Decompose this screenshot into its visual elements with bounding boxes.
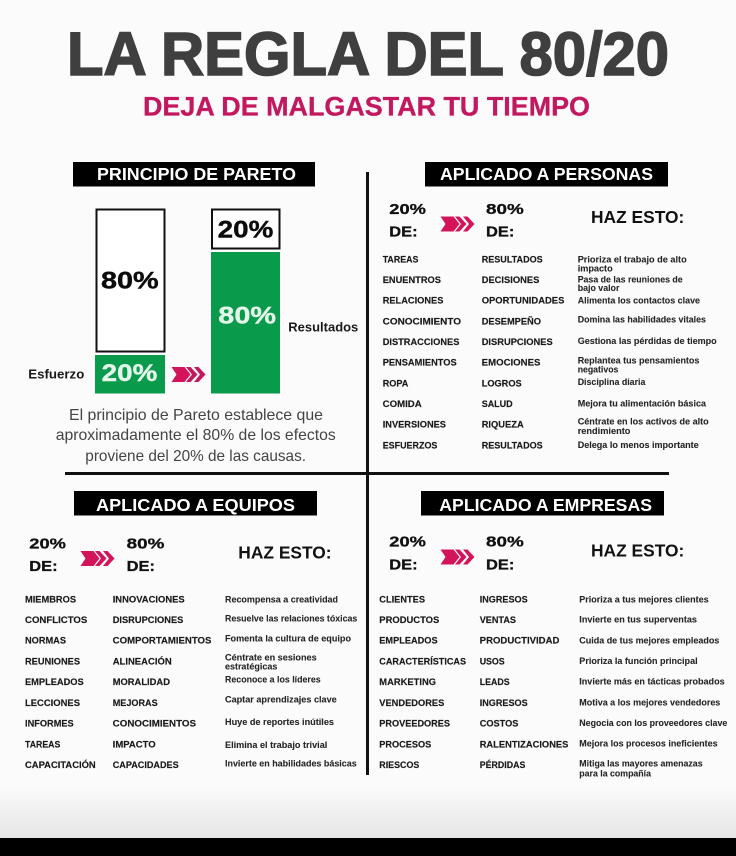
column: acciones equipos: Recompensa a creatividad [225,594,338,605]
column: 80% equipos: MORALIDAD [113,677,170,688]
label: 80% de: 80% [486,202,524,218]
label: 80% de: DE: [486,557,514,573]
column: 80% equipos: INNOVACIONES [113,594,185,605]
label: esfuerzo: Esfuerzo [28,367,85,381]
column: acciones empresas: Motiva a los mejores vendedores [579,697,720,708]
column: 20% empresas: VENDEDORES [379,698,444,709]
column: 20% equipos: MIEMBROS [25,594,76,605]
column: acciones personas: Replantea tus pensamientos [578,355,699,366]
heading: principio de Pareto [73,162,315,186]
bar: resultados [211,210,280,394]
label: 80% de: 80% [486,535,524,551]
label: 20% de [389,535,426,573]
column: 80% empresas: COSTOS [480,719,518,730]
arrow: triple chevron [440,550,474,564]
column: acciones equipos: Fomenta la cultura de equipo [225,633,351,644]
column: acciones empresas: Mejora los procesos ineficientes [579,739,718,750]
column: 20% personas: ROPA [383,379,409,390]
bar: esfuerzo: 20% [102,360,157,387]
column: 80% empresas: RALENTIZACIONES [480,739,568,750]
column: 80% personas: LOGROS [482,379,522,390]
panel: principio de Pareto [28,162,358,465]
column: 80% empresas: VENTAS [480,615,516,626]
arrow: triple chevron [440,216,474,232]
column: acciones equipos: Captar aprendizajes clave [225,694,337,705]
column: 20% empresas: PRODUCTOS [379,615,439,626]
column: acciones personas [578,254,717,451]
label: 80% de: 80% [127,536,165,552]
column: 20% equipos: CAPACITACIÓN [25,759,96,771]
bar: resultados: 20% [218,216,273,243]
arrow: triple chevron [172,367,206,382]
label: haz esto: HAZ ESTO: [591,541,684,561]
column: acciones empresas: Prioriza la función principal [579,656,698,667]
column: 80% personas: DECISIONES [482,275,539,286]
label: resultados: Resultados [288,321,358,335]
heading: aplicado a equipos: APLICADO A EQUIPOS [96,495,295,515]
column: 20% personas: INVERSIONES [383,420,446,431]
column: acciones empresas: Prioriza a tus mejores clientes [579,594,709,605]
label: 80% de [127,536,165,575]
text: Pareto description: aproximadamente el 80% de los efectos [56,427,336,444]
text: Pareto description [56,407,336,465]
column: acciones empresas: Invierte en tus superventas [579,615,697,626]
column: acciones personas: Disciplina diaria [578,377,646,388]
column: 80% personas: EMOCIONES [482,358,540,369]
label: haz esto: HAZ ESTO: [238,542,332,562]
column: acciones personas: Céntrate en los activos de alto [578,416,709,427]
column: 20% empresas: RIESCOS [379,760,419,771]
bar: esfuerzo [95,210,165,394]
column: 80% personas: RESULTADOS [482,440,543,451]
label: 20% de [29,536,66,575]
column: 80% personas: DESEMPEÑO [482,316,541,327]
column: 80% personas: OPORTUNIDADES [482,296,564,307]
column: acciones personas: impacto [578,264,613,275]
column: acciones equipos: Invierte en habilidades básicas [225,759,357,770]
column: 80% empresas: LEADS [480,677,510,688]
bar: resultados: 80% [218,302,276,329]
column: acciones personas: Prioriza el trabajo de alto [578,254,687,265]
column: 20% empresas [379,594,466,771]
column: acciones empresas [579,594,727,779]
column: 80% equipos: MEJORAS [113,698,158,709]
heading: aplicado a empresas: APLICADO A EMPRESAS [439,495,652,515]
column: acciones personas: Mejora tu alimentación básica [578,399,707,410]
subtitle: DEJA DE MALGASTAR TU TIEMPO [143,92,590,122]
column: acciones empresas: Negocia con los proveedores clave [579,718,727,729]
column: 80% equipos: IMPACTO [113,739,156,750]
column: acciones equipos: Elimina el trabajo trivial [225,740,327,751]
column: 20% personas: COMIDA [383,399,422,410]
label: haz esto: HAZ ESTO: [591,207,684,227]
column: 80% equipos: ALINEACIÓN [113,655,172,667]
arrow: triple chevron [80,551,114,566]
heading: aplicado a personas: APLICADO A PERSONAS [440,164,653,184]
column: acciones personas: bajo valor [578,283,620,294]
column: 80% empresas: USOS [480,656,505,667]
column: acciones empresas: Invierte más en tácticas probados [579,677,725,688]
column: 20% equipos: INFORMES [25,719,74,730]
column: acciones personas: Alimenta los contactos clave [578,295,700,306]
column: 20% equipos: CONFLICTOS [25,615,87,626]
column: acciones empresas: Mitiga las mayores amenazas [579,759,703,770]
column: 20% equipos: NORMAS [25,636,66,647]
column: 80% equipos: DISRUPCIONES [113,615,183,626]
label: 80% de: DE: [127,559,155,575]
text: Pareto description: proviene del 20% de las causas. [85,448,306,465]
label: 80% de [486,535,524,573]
column: acciones personas: rendimiento [578,426,631,437]
column: 20% equipos: EMPLEADOS [25,677,84,688]
bottom black band [0,838,736,856]
column: acciones equipos: Reconoce a los líderes [225,675,321,686]
column: acciones personas: Pasa de las reuniones de [578,274,683,285]
column: 80% equipos [113,594,211,771]
column: acciones personas: Delega lo menos importante [578,440,699,451]
label: 20% de [389,202,426,241]
column: 20% empresas: CARACTERÍSTICAS [379,656,466,667]
title: LA REGLA DEL 80/20 [67,20,669,88]
column: 20% personas: CONOCIMIENTO [383,316,461,327]
column: 20% personas: DISTRACCIONES [383,337,459,348]
label: 80% de: DE: [486,225,514,241]
column: acciones equipos: Huye de reportes inútiles [225,717,334,728]
column: 80% personas: RESULTADOS [482,254,543,265]
column: 20% personas: TAREAS [383,254,418,265]
bar: esfuerzo: 80% [101,267,159,294]
column: 20% empresas: EMPLEADOS [379,636,438,647]
label: 20% de: DE: [389,557,418,573]
column: acciones equipos: estratégicas [225,661,277,672]
column: 20% personas [383,254,461,451]
column: 80% empresas [480,594,568,771]
column: 20% equipos: LECCIONES [25,698,80,709]
heading: aplicado a equipos [74,491,317,516]
column: 80% equipos: COMPORTAMIENTOS [113,636,211,647]
column: 20% personas: ENUENTROS [383,275,441,286]
column: 20% empresas: PROCESOS [379,739,431,750]
column: 20% equipos: REUNIONES [25,656,80,667]
column: 20% personas: RELACIONES [383,296,443,307]
column: acciones equipos [225,594,357,770]
label: 20% de: DE: [29,559,58,575]
panel: aplicado a equipos [25,491,357,771]
column: acciones personas: Gestiona las pérdidas de tiempo [578,336,717,347]
label: 80% de [486,202,524,241]
text: Pareto description: El principio de Pareto establece que [69,407,323,424]
column: 80% personas: SALUD [482,399,513,410]
column: 20% empresas: MARKETING [379,677,436,688]
column: 20% personas: PENSAMIENTOS [383,358,457,369]
column: acciones personas: negativos [578,365,618,376]
label: 20% de: DE: [389,225,418,241]
column: 80% equipos: CAPACIDADES [113,760,179,771]
label: 20% de: 20% [389,202,426,218]
label: 20% de: 20% [389,535,426,551]
panel: aplicado a personas [383,162,717,451]
column: 20% equipos [25,594,96,771]
column: acciones empresas: para la compañía [579,768,652,779]
heading: principio de Pareto: PRINCIPIO DE PARETO [97,164,296,184]
column: acciones equipos: Céntrate en sesiones [225,652,317,663]
column: 80% empresas: INGRESOS [480,594,528,605]
column: 20% empresas: PROVEEDORES [379,719,450,730]
column: 80% empresas: INGRESOS [480,698,528,709]
column: 80% empresas: PRODUCTIVIDAD [480,636,560,647]
column: 20% equipos: TAREAS [25,739,60,750]
label: 20% de: 20% [29,536,66,552]
column: 80% equipos: CONOCIMIENTOS [113,719,196,730]
column: 20% personas: ESFUERZOS [383,440,437,451]
column: acciones equipos: Resuelve las relaciones tóxicas [225,614,357,625]
panel: aplicado a empresas [379,491,727,779]
column: 20% empresas: CLIENTES [379,594,425,605]
column: acciones personas: Domina las habilidades vitales [578,314,706,325]
column: acciones empresas: Cuida de tus mejores empleados [579,635,719,646]
column: 80% personas: DISRUPCIONES [482,337,553,348]
column: 80% empresas: PÉRDIDAS [480,760,525,771]
column: 80% personas [482,254,564,451]
column: 80% personas: RIQUEZA [482,420,524,431]
